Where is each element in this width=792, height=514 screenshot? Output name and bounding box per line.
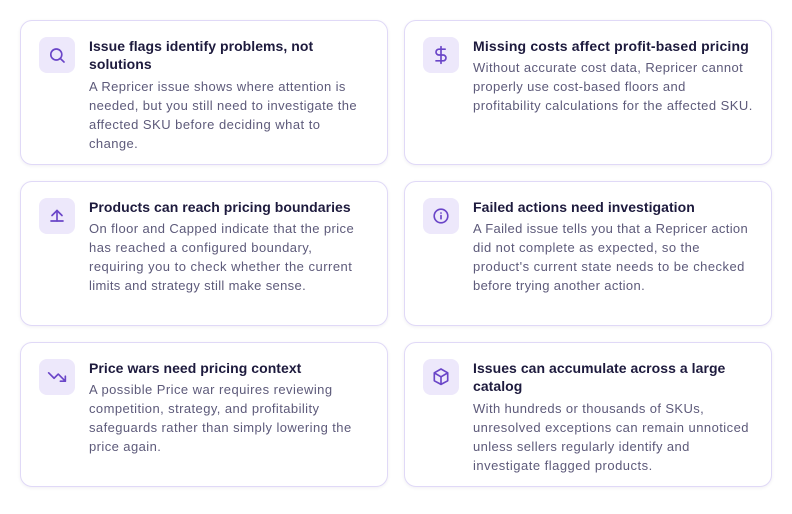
body text: price again. (89, 439, 161, 454)
heading: Failed actions need investigation (473, 199, 695, 215)
icon: info circle (423, 198, 459, 234)
body text: change. (89, 136, 138, 151)
body text: A Repricer issue shows where attention is (89, 79, 346, 94)
icon: trending down (39, 359, 75, 395)
heading: catalog (473, 378, 522, 394)
body text: investigate flagged products. (473, 458, 653, 473)
body text: product's current state needs to be checked (473, 259, 745, 274)
heading: solutions (89, 56, 152, 72)
body text: unresolved exceptions can remain unnoticed (473, 420, 749, 435)
text: price wars (89, 360, 352, 454)
body text: A possible Price war requires reviewing (89, 382, 333, 397)
body text: before trying another action. (473, 278, 645, 293)
heading: Issues can accumulate across a large (473, 360, 725, 376)
heading (473, 360, 725, 394)
panel: issue flags (20, 20, 388, 165)
body text: has reached a configured boundary, (89, 240, 312, 255)
panel: price wars (20, 342, 388, 487)
text: failed actions (473, 199, 748, 293)
body text: A Failed issue tells you that a Repricer action (473, 221, 748, 236)
body text (473, 221, 748, 293)
heading: Missing costs affect profit-based pricing (473, 38, 749, 54)
body text: needed, but you still need to investigate the (89, 98, 357, 113)
heading: Issue flags identify problems, not (89, 38, 313, 54)
panel: failed actions (404, 181, 772, 326)
body text: affected SKU before deciding what to (89, 117, 320, 132)
body text: properly use cost-based floors and (473, 79, 686, 94)
text: pricing boundaries (89, 199, 354, 293)
icon: dollar sign (423, 37, 459, 73)
panel: pricing boundaries (20, 181, 388, 326)
body text (473, 401, 749, 473)
body text: unless sellers regularly identify and (473, 439, 690, 454)
heading: Products can reach pricing boundaries (89, 199, 351, 215)
heading (89, 38, 313, 72)
body text: Without accurate cost data, Repricer cannot (473, 60, 743, 75)
panel: missing costs (404, 20, 772, 165)
body text: did not complete as expected, so the (473, 240, 700, 255)
text: missing costs (473, 38, 753, 113)
body text: limits and strategy still make sense. (89, 278, 306, 293)
text: accumulating issues (473, 360, 749, 473)
body text (89, 382, 352, 454)
heading: Price wars need pricing context (89, 360, 301, 376)
body text (473, 60, 753, 113)
body text: With hundreds or thousands of SKUs, (473, 401, 704, 416)
body text (89, 221, 354, 293)
icon: magnifier (39, 37, 75, 73)
body text: requiring you to check whether the current (89, 259, 352, 274)
body text (89, 79, 357, 151)
body text: On floor and Capped indicate that the price (89, 221, 354, 236)
icon: arrow up to line (39, 198, 75, 234)
body text: competition, strategy, and profitability (89, 401, 319, 416)
body text: profitability calculations for the affected SKU. (473, 98, 753, 113)
body text: safeguards rather than simply lowering the (89, 420, 352, 435)
text: issue flags (89, 38, 357, 151)
icon: package box (423, 359, 459, 395)
panel: accumulating issues (404, 342, 772, 487)
